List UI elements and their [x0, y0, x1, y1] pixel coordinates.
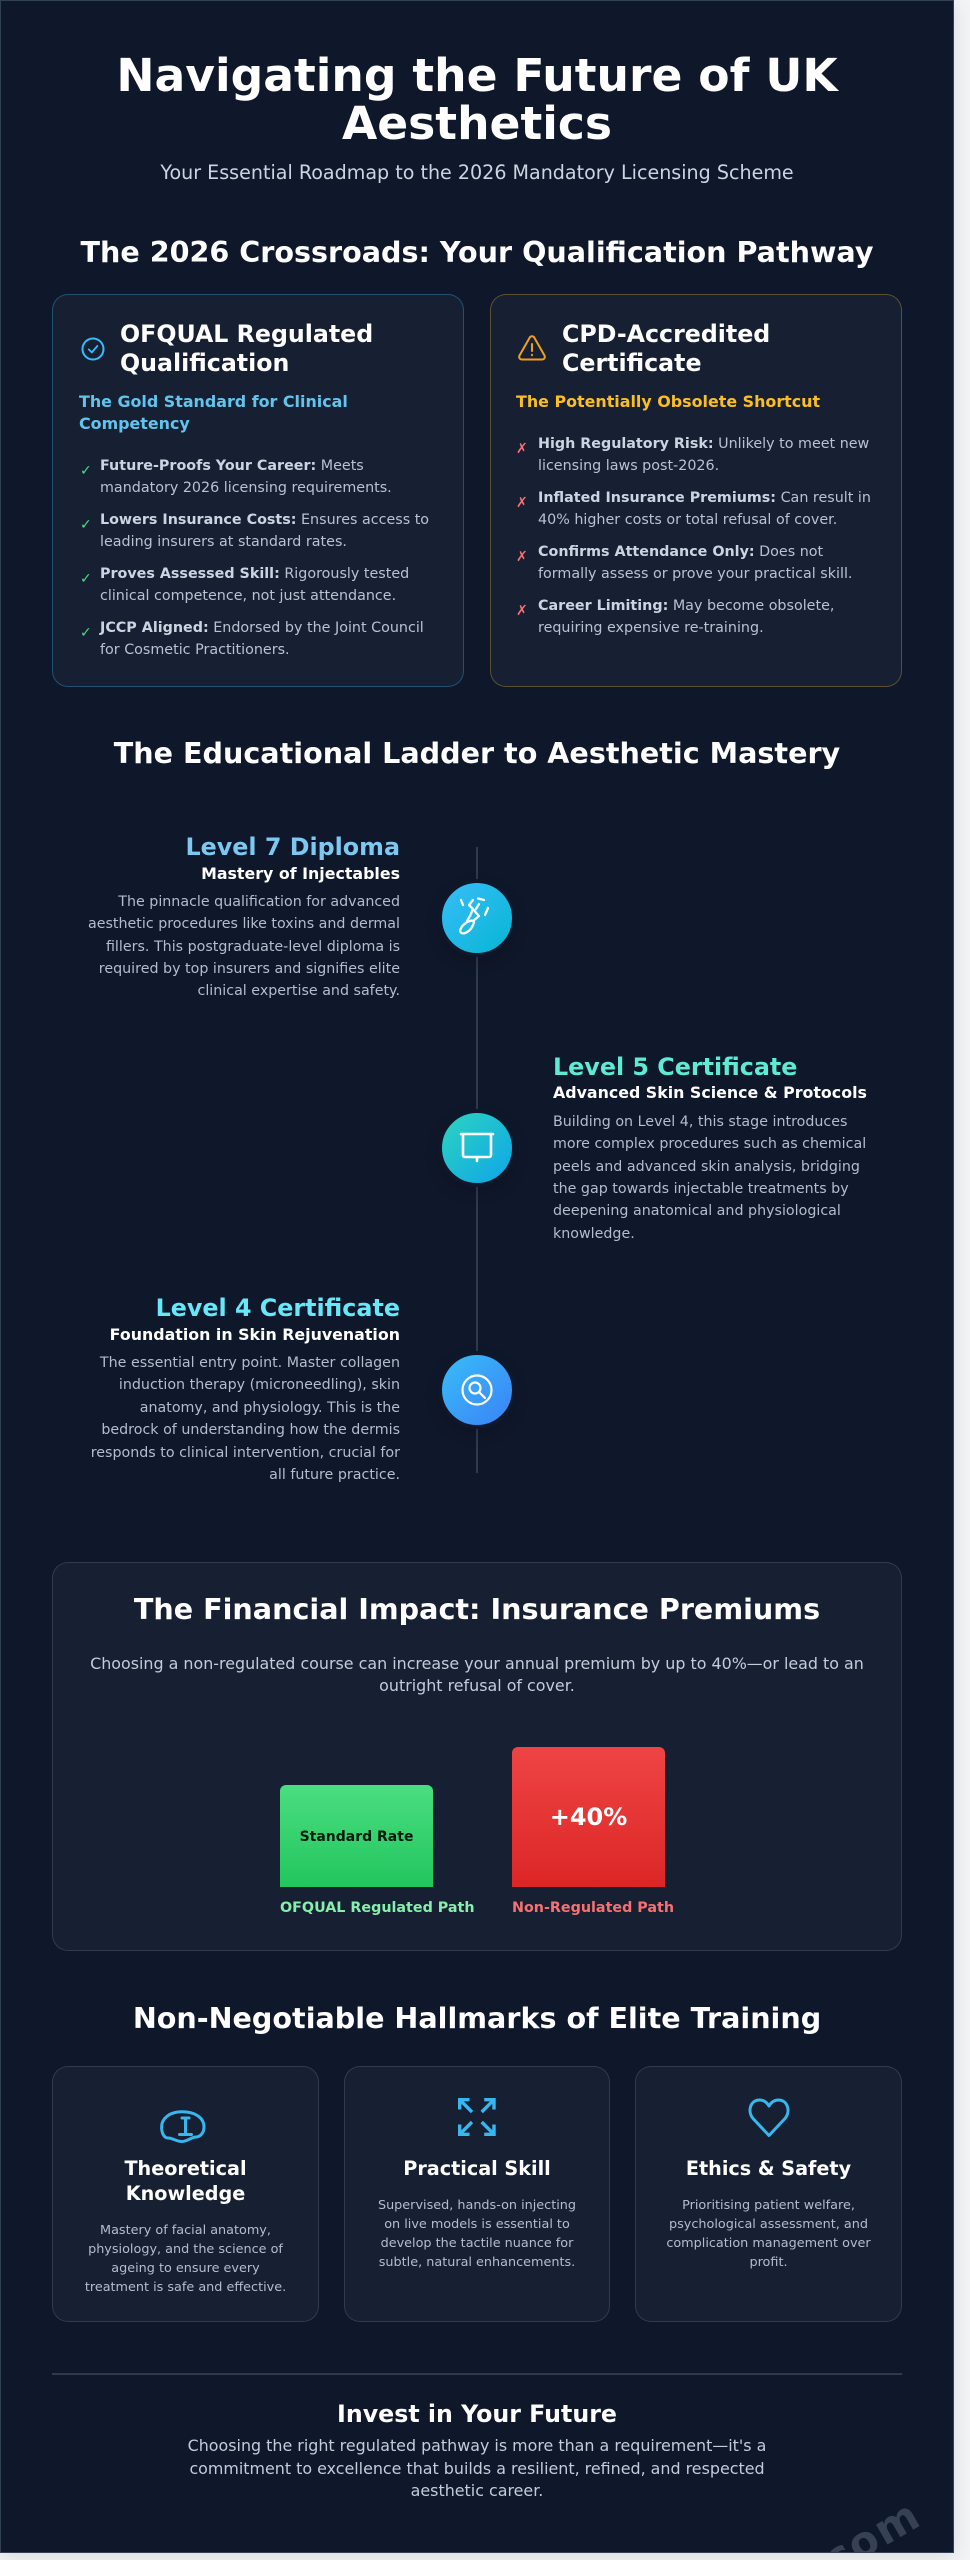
footer text	[188, 2436, 766, 2500]
card title: Theoretical	[124, 2157, 247, 2180]
card title: Certificate	[562, 349, 702, 377]
list item	[80, 566, 409, 604]
panel: CPD-accredited certificate	[490, 294, 902, 687]
bar: +40%	[512, 1747, 665, 1887]
list item	[516, 490, 871, 528]
list item	[516, 544, 852, 582]
timeline line	[476, 847, 478, 1473]
card title: Practical Skill	[403, 2157, 551, 2180]
footer text: Choosing the right regulated pathway is more than a requirement—it's a	[188, 2436, 766, 2455]
bar label: non-regulated: Non-Regulated Path	[512, 1900, 674, 1916]
list item: for Cosmetic Practitioners.	[100, 642, 290, 658]
level 4 description: The essential entry point. Master collagen	[100, 1355, 400, 1371]
list item: Career Limiting: May become obsolete,	[538, 598, 834, 614]
footer text: commitment to excellence that builds a resilient, refined, and respected	[189, 2458, 765, 2478]
card subtitle: The Potentially Obsolete Shortcut	[516, 392, 820, 410]
description: Choosing a non-regulated course can increase your annual premium by up to 40%—or lead to an	[90, 1654, 864, 1672]
icon: brain	[160, 2110, 206, 2143]
panel: OFQUAL regulated qualification	[52, 294, 464, 687]
card title	[120, 320, 373, 377]
card subtitle: Competency	[79, 414, 190, 433]
level 5 description: knowledge.	[553, 1226, 635, 1242]
card title	[124, 2157, 247, 2205]
bar label: OFQUAL: OFQUAL Regulated Path	[280, 1900, 475, 1916]
card title: Ethics & Safety	[686, 2157, 851, 2180]
panel: practical skill	[344, 2066, 610, 2322]
level 7 description	[88, 894, 400, 999]
card text	[378, 2198, 576, 2270]
level 4 description: induction therapy (microneedling), skin	[119, 1377, 400, 1393]
icon: expand arrows	[458, 2098, 496, 2136]
level 5 description	[553, 1114, 866, 1242]
bar: +40%: +40%	[550, 1803, 627, 1831]
list item: clinical competence, not just attendance.	[100, 588, 396, 604]
list item	[516, 436, 869, 474]
list item: ✗	[516, 441, 528, 457]
description	[90, 1654, 864, 1695]
card title: Knowledge	[126, 2182, 245, 2205]
list item	[516, 598, 834, 636]
heading: financial impact: The Financial Impact: Insurance Premiums	[134, 1592, 820, 1626]
panel: theoretical knowledge	[52, 2066, 319, 2322]
subtitle: Your Essential Roadmap to the 2026 Mandatory Licensing Scheme	[160, 161, 794, 184]
card subtitle	[79, 392, 348, 433]
bar: standard rate	[280, 1785, 433, 1887]
level 7 description: The pinnacle qualification for advanced	[118, 894, 400, 910]
heading: educational ladder: The Educational Ladder to Aesthetic Mastery	[114, 736, 840, 770]
level 4 description: anatomy, and physiology. This is the	[140, 1400, 400, 1416]
level 4 description: bedrock of understanding how the dermis	[101, 1422, 400, 1438]
card title: Qualification	[120, 349, 289, 377]
card title: OFQUAL Regulated	[120, 320, 373, 348]
list item	[80, 512, 429, 550]
panel: ethics and safety	[635, 2066, 902, 2322]
level 5 node icon: presentation board	[438, 1109, 516, 1187]
footer text: aesthetic career.	[411, 2481, 543, 2500]
list item: mandatory 2026 licensing requirements.	[100, 480, 392, 496]
list item: ✓	[80, 625, 92, 641]
card text	[85, 2223, 286, 2295]
list item: licensing laws post-2026.	[538, 458, 719, 474]
list item: ✗	[516, 603, 528, 619]
heading: qualification pathway: The 2026 Crossroads: Your Qualification Pathway	[80, 235, 873, 269]
level 4 description: all future practice.	[269, 1467, 400, 1483]
level 5 description: Building on Level 4, this stage introduces	[553, 1114, 847, 1130]
card text: Prioritising patient welfare,	[682, 2198, 855, 2212]
card text	[666, 2198, 871, 2270]
level 7 heading: Level 7 Diploma	[185, 833, 400, 861]
level 4 description	[91, 1355, 400, 1483]
level 4 text block	[91, 1294, 400, 1483]
title: Navigating the Future of UK	[116, 49, 838, 102]
list item: ✓	[80, 517, 92, 533]
list item: Inflated Insurance Premiums: Can result in	[538, 490, 871, 506]
card text: treatment is safe and effective.	[85, 2280, 286, 2295]
level 7 subheading: Mastery of Injectables	[201, 864, 400, 882]
level 7 node icon: syringe	[438, 879, 516, 957]
list item: requiring expensive re-training.	[538, 620, 764, 636]
level 5 text block	[553, 1053, 867, 1242]
list item: ✗	[516, 549, 528, 565]
level 5 description: deepening anatomical and physiological	[553, 1203, 841, 1219]
icon: check circle	[82, 338, 104, 360]
card text: Supervised, hands-on injecting	[378, 2198, 576, 2212]
title: Aesthetics	[342, 97, 612, 150]
icon: warning triangle	[518, 335, 546, 360]
icon: heart	[748, 2098, 790, 2138]
list item: 40% higher costs or total refusal of cover.	[538, 512, 837, 528]
list item: Confirms Attendance Only: Does not	[538, 544, 823, 560]
level 7 description: required by top insurers and signifies elite	[99, 961, 400, 977]
card text: complication management over	[666, 2236, 871, 2250]
level 7 description: aesthetic procedures like toxins and dermal	[88, 916, 400, 932]
level 4 heading: Level 4 Certificate	[156, 1294, 400, 1322]
description: outright refusal of cover.	[379, 1676, 575, 1695]
heading: hallmarks: Non-Negotiable Hallmarks of Elite Training	[133, 2001, 821, 2035]
level 7 description: clinical expertise and safety.	[198, 983, 400, 999]
card text: psychological assessment, and	[669, 2216, 868, 2232]
level 4 description: responds to clinical intervention, crucial for	[91, 1445, 400, 1461]
level 5 heading: Level 5 Certificate	[553, 1053, 797, 1081]
level 5 description: more complex procedures such as chemical	[553, 1136, 866, 1152]
card text: physiology, and the science of	[88, 2242, 283, 2257]
level 5 subheading: Advanced Skin Science & Protocols	[553, 1082, 867, 1102]
level 5 description: the gap towards injectable treatments by	[553, 1181, 849, 1197]
list item: ✓	[80, 571, 92, 587]
list item: ✓	[80, 463, 92, 479]
card text: develop the tactile nuance for	[381, 2236, 573, 2250]
list item: High Regulatory Risk: Unlikely to meet new	[538, 436, 869, 452]
card title	[562, 320, 770, 377]
list item: leading insurers at standard rates.	[100, 534, 347, 550]
bar: standard rate: Standard Rate	[300, 1829, 413, 1845]
level 5 description: peels and advanced skin analysis, bridging	[553, 1158, 860, 1174]
footer heading: Invest in Your Future	[337, 2400, 617, 2428]
list item: JCCP Aligned: Endorsed by the Joint Council	[100, 620, 424, 636]
list item: Future-Proofs Your Career: Meets	[100, 458, 364, 474]
title	[116, 49, 839, 150]
list item: ✗	[516, 495, 528, 511]
list item: formally assess or prove your practical skill.	[538, 566, 852, 582]
panel: financial impact	[52, 1562, 902, 1951]
list item: Lowers Insurance Costs: Ensures access to	[100, 512, 429, 528]
level 4 node icon: magnifier circle	[438, 1351, 516, 1429]
card text: subtle, natural enhancements.	[379, 2254, 575, 2270]
card text: profit.	[749, 2254, 788, 2270]
level 7 text block	[88, 833, 400, 999]
card text: Mastery of facial anatomy,	[100, 2223, 271, 2238]
list item: Proves Assessed Skill: Rigorously tested	[100, 566, 409, 582]
list item	[80, 458, 392, 496]
card text: ageing to ensure every	[111, 2261, 260, 2276]
card text: on live models is essential to	[384, 2216, 570, 2232]
level 4 subheading: Foundation in Skin Rejuvenation	[110, 1324, 400, 1344]
card title: CPD-Accredited	[562, 320, 770, 348]
card subtitle: The Gold Standard for Clinical	[79, 392, 348, 410]
list item	[80, 620, 424, 658]
level 7 description: fillers. This postgraduate-level diploma is	[106, 938, 400, 954]
